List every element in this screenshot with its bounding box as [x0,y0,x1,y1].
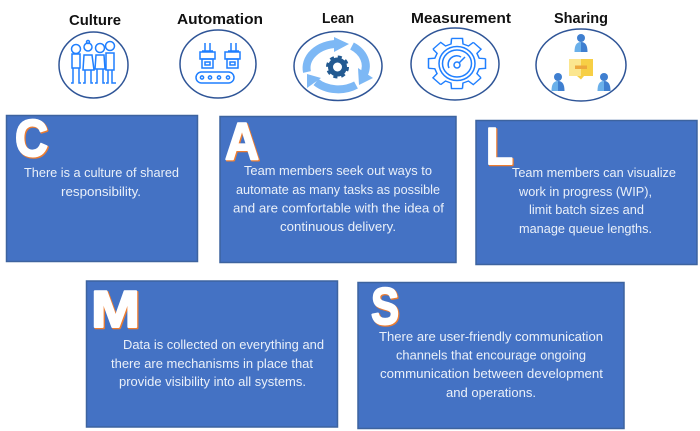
heading: Measurement: Measurement [411,11,511,27]
icon: measurement gear gauge [411,28,499,100]
letter A: A [225,113,259,171]
panel: A [220,113,456,262]
letter L: L [487,119,514,177]
text: C description [24,165,179,199]
letter S: S [372,279,400,337]
letter C: C [16,111,49,169]
text: L description: work in progress (WIP), [518,184,652,199]
text: L description [512,165,676,236]
icon: lean cycle with gear [294,32,382,100]
text: M description: provide visibility into all systems. [119,374,306,389]
heading: Lean: Lean [322,11,354,27]
heading: Automation: Automation [177,12,263,28]
letter M: M [92,282,141,340]
heading: Sharing: Sharing [554,11,608,27]
letter L: L [486,118,513,176]
text: C description: There is a culture of shared [24,165,179,180]
text: A description: and are comfortable with the idea of [233,200,444,216]
text: L description: Team members can visualize [512,165,676,180]
text: L description: limit batch sizes and [529,202,644,217]
icon: sharing people and message [536,29,626,101]
letter S: S [371,278,399,336]
text: L description: manage queue lengths. [519,221,652,236]
text: A description: automate as many tasks as possible [236,182,440,197]
letter C: C [15,110,48,168]
text: M description: there are mechanisms in place that [111,356,313,371]
text: M description [111,337,324,389]
text: S description: and operations. [446,385,536,400]
icon: culture team [59,32,128,98]
letter A: A [226,114,260,172]
text: A description: continuous delivery. [280,219,396,234]
text: S description: There are user-friendly communication [379,329,603,344]
text: S description: channels that encourage ongoing [396,348,586,362]
text: A description [233,163,444,234]
letter M: M [91,281,140,339]
panel: S [358,278,624,428]
panel: M [86,281,338,427]
panel: L [476,118,697,264]
heading: Culture: Culture [69,13,121,29]
text: M description: Data is collected on everything and [123,337,324,352]
icon: automation robots and conveyor [180,30,256,98]
text: S description [379,329,603,400]
text: S description: communication between development [380,366,603,381]
text: C description: responsibility. [61,184,141,199]
panel: C [6,110,198,262]
text: A description: Team members seek out ways to [244,163,432,178]
